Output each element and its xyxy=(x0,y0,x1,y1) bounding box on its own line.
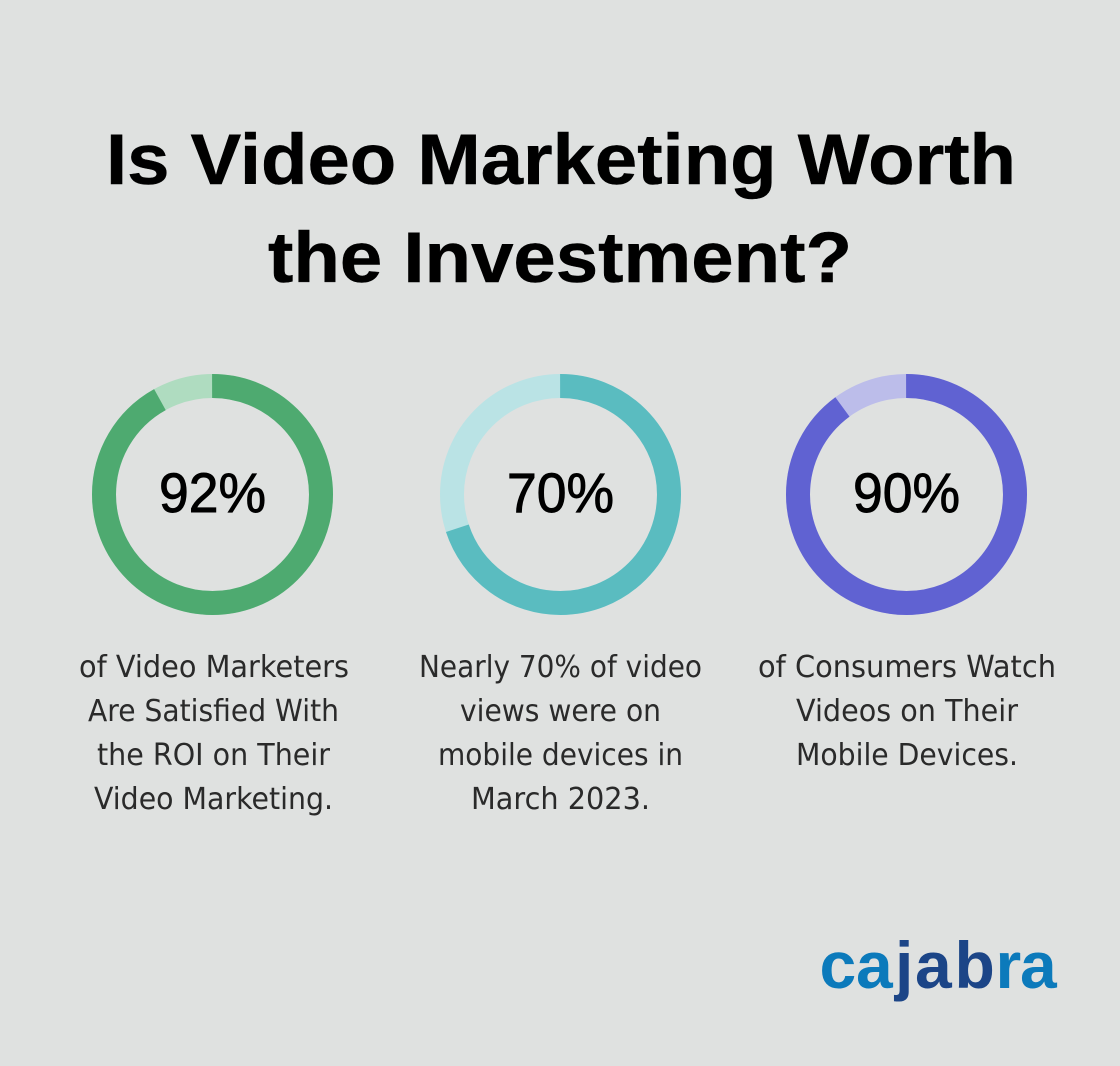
panel: 92% satisfied with ROI xyxy=(79,386,349,817)
stat: 92%: 92% xyxy=(159,461,266,524)
description: video marketers: Are Satisfied With xyxy=(88,694,339,729)
panel: 70% mobile views xyxy=(419,386,702,817)
description: video marketers: Video Marketing. xyxy=(94,782,333,817)
description: video marketers: of Video Marketers xyxy=(79,650,349,685)
description: consumers on mobile: Videos on Their xyxy=(796,694,1019,729)
description: mobile video views: March 2023. xyxy=(471,782,650,817)
title: Is Video Marketing Worth xyxy=(106,121,1016,200)
description: mobile video views: mobile devices in xyxy=(438,738,683,773)
donut chart: 90% xyxy=(798,386,1015,603)
description: consumers on mobile: of Consumers Watch xyxy=(758,650,1056,685)
description: mobile video views: views were on xyxy=(460,694,661,729)
description: mobile video views: Nearly 70% of video xyxy=(419,650,702,685)
title: the Investment? xyxy=(268,219,852,298)
description: video marketers: the ROI on Their xyxy=(97,738,331,773)
panel: 90% consumers watch on mobile xyxy=(758,386,1056,773)
donut chart: 92% xyxy=(104,386,321,603)
logo: cajabra: cajabra xyxy=(820,928,1058,1002)
description: consumers on mobile: Mobile Devices. xyxy=(796,738,1018,773)
stat: 90%: 90% xyxy=(853,461,960,524)
donut chart: 70% xyxy=(452,386,669,603)
description: consumers on mobile xyxy=(758,650,1056,773)
description: video marketers xyxy=(79,650,349,817)
description: mobile video views xyxy=(419,650,702,817)
stat: 70%: 70% xyxy=(507,461,614,524)
title xyxy=(106,121,1016,298)
